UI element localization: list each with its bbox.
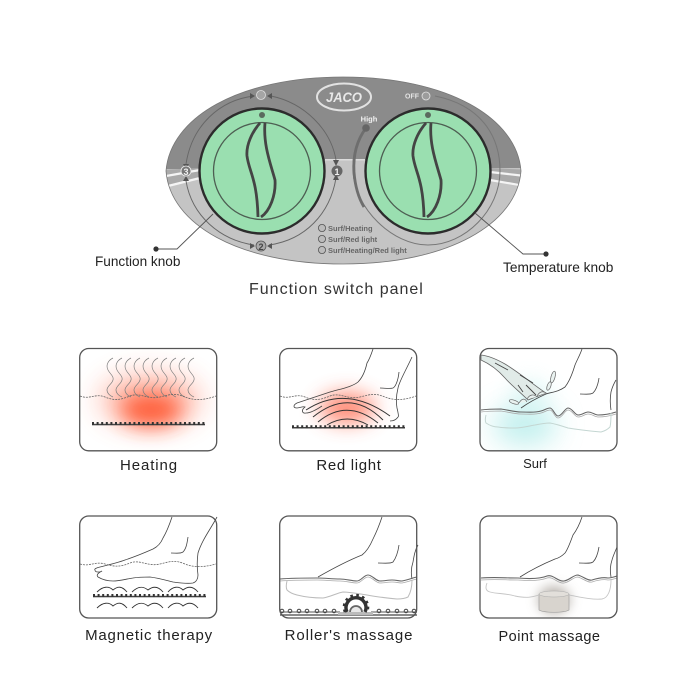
panel: function switch panel <box>160 70 530 270</box>
function dial markers <box>181 90 342 252</box>
panel: heating <box>80 348 217 474</box>
massage point <box>539 591 569 612</box>
heating element <box>92 424 205 425</box>
label: Heating <box>120 457 178 474</box>
logo: JACO: JACO <box>326 89 362 105</box>
label: Point massage <box>499 629 600 645</box>
frame <box>480 348 617 451</box>
logo: JACO <box>317 84 371 110</box>
panel: red light <box>280 348 417 474</box>
legend: function modes: Surf/Heating/Red light <box>328 246 407 255</box>
magnetic waves <box>97 587 198 608</box>
label: OFF: OFF <box>405 94 420 100</box>
label: Roller's massage <box>285 627 413 644</box>
heading: function switch panel: Function switch panel <box>249 281 424 298</box>
water glow <box>493 379 557 445</box>
rail <box>280 609 417 615</box>
temperature arc <box>353 96 500 245</box>
submerged foot <box>286 580 412 599</box>
water line <box>481 408 616 416</box>
panel: magnetic therapy <box>80 516 217 644</box>
heating element <box>292 427 405 428</box>
heat glow <box>100 374 200 426</box>
legend: function modes: Surf/Red light <box>328 235 378 244</box>
function dial arrows <box>183 93 339 249</box>
label: Magnetic therapy <box>85 627 213 644</box>
label: OFF <box>405 92 430 100</box>
panel body <box>166 77 521 264</box>
function dial markers: 1 <box>334 167 340 177</box>
roller <box>338 595 373 615</box>
water line <box>80 561 216 567</box>
foot <box>520 517 617 577</box>
water line <box>80 394 216 400</box>
callout: function knob: Function knob <box>95 254 180 269</box>
knob: temperature <box>366 108 490 234</box>
frame <box>80 516 217 618</box>
legend: function modes <box>318 224 407 255</box>
callout: temperature knob: Temperature knob <box>503 260 614 275</box>
legend: function modes: Surf/Heating <box>328 224 373 233</box>
foot <box>95 517 217 583</box>
panel: surf <box>480 348 617 471</box>
water line <box>280 575 417 581</box>
foot <box>521 349 616 410</box>
water line <box>481 575 617 581</box>
knob: function <box>200 108 324 234</box>
label: Red light <box>316 457 382 474</box>
callout: temperature knob <box>475 213 614 275</box>
red glow <box>319 393 375 423</box>
panel: roller's massage <box>280 516 418 644</box>
light arcs <box>306 398 390 425</box>
callout: function knob <box>95 214 213 269</box>
foot <box>318 517 418 579</box>
foot <box>294 349 412 421</box>
frame <box>280 516 417 618</box>
heat waves <box>107 358 194 397</box>
water jet <box>481 355 556 405</box>
frame <box>480 516 617 618</box>
label: High: High <box>361 114 378 124</box>
element <box>93 596 206 597</box>
function dial markers: 2 <box>258 242 264 252</box>
frame <box>80 348 217 451</box>
frame <box>280 348 417 451</box>
massage glow <box>538 586 570 614</box>
submerged foot <box>486 580 611 599</box>
water line <box>280 394 416 400</box>
function dial markers: 3 <box>183 167 189 177</box>
panel: point massage <box>480 516 617 645</box>
label: Surf <box>523 456 547 471</box>
submerged foot <box>485 413 611 432</box>
panel outline <box>166 77 521 264</box>
